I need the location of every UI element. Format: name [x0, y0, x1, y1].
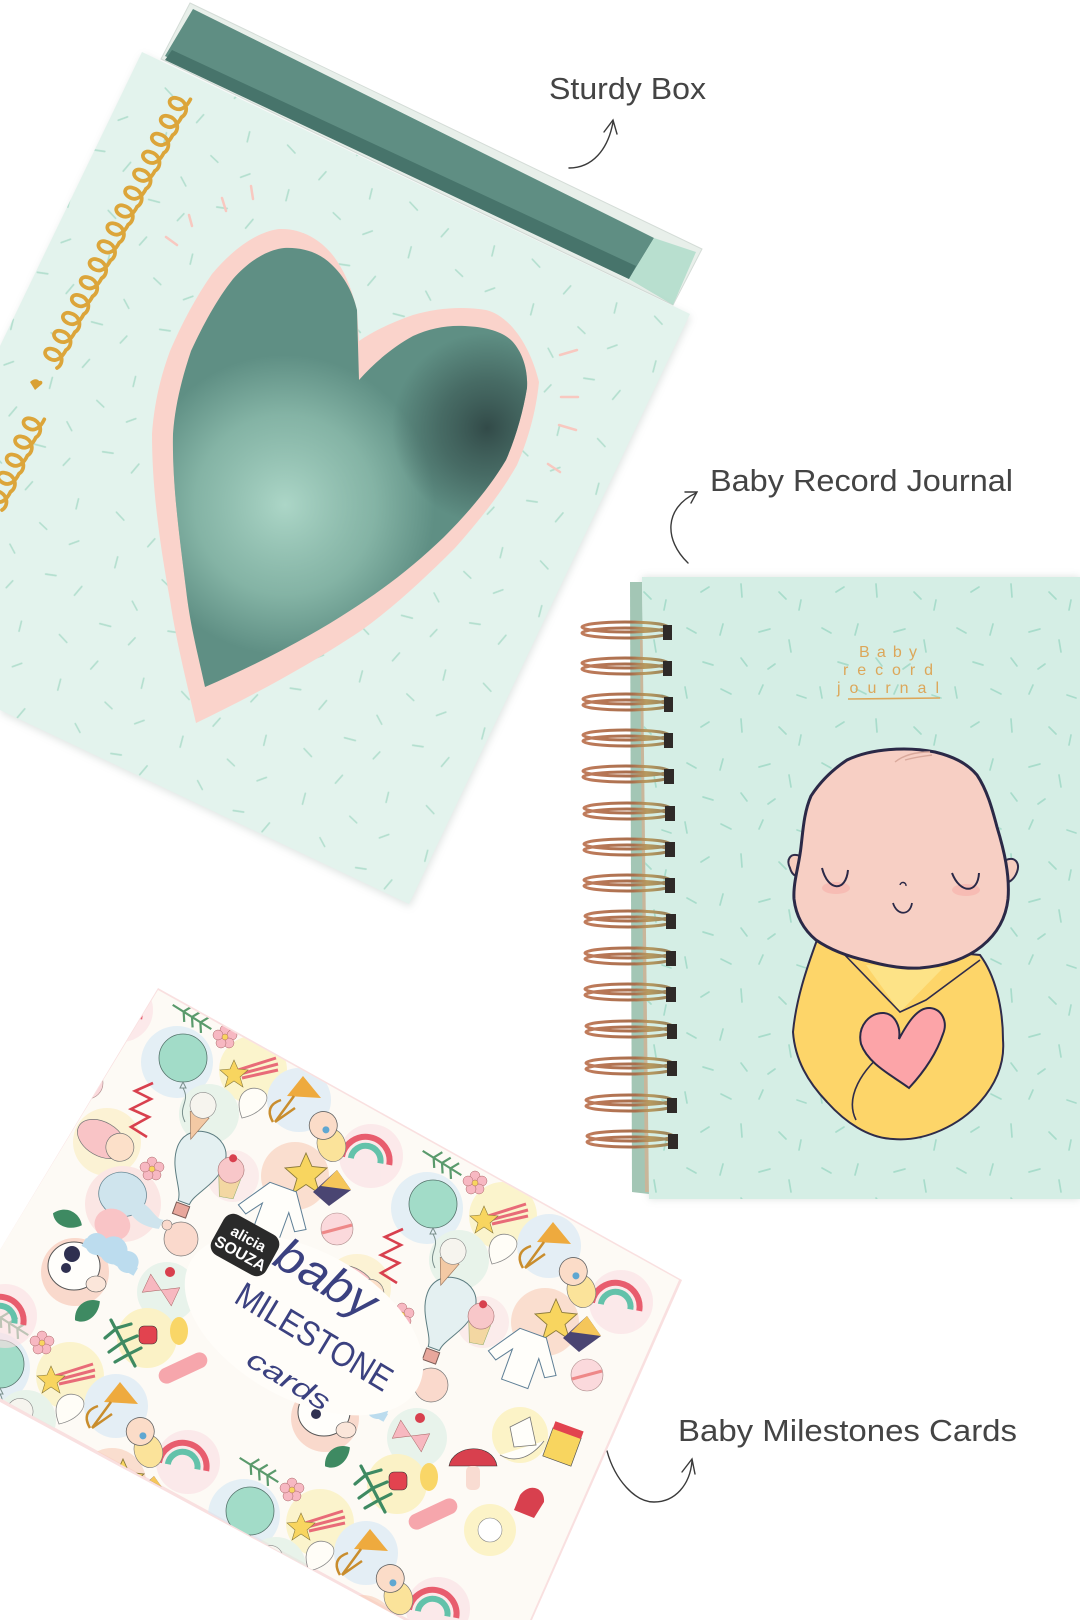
- swaddle body: [793, 940, 1003, 1139]
- head: [794, 749, 1008, 968]
- inner shade band: [165, 50, 636, 279]
- right ear: [1003, 859, 1018, 883]
- binding holes: [663, 625, 678, 1149]
- journal foil title: Baby: [859, 644, 917, 661]
- journal foil title: [836, 644, 939, 697]
- swaddle neck: [866, 965, 943, 1012]
- card title: cards: [241, 1344, 336, 1417]
- central oval: [184, 1238, 424, 1416]
- journal spine edge: [640, 640, 649, 1192]
- brand badge: alicia: [228, 1223, 269, 1256]
- brand badge: SOUZA: [211, 1233, 269, 1275]
- doodle pattern: [0, 1001, 653, 1620]
- nose: [900, 882, 906, 886]
- arrow: baby milestones cards: [607, 1451, 695, 1502]
- baby illustration: [788, 749, 1018, 1139]
- brand badge: [207, 1210, 283, 1280]
- gold foil spiral: [0, 91, 192, 511]
- doodle: toy block: [543, 1421, 584, 1466]
- journal shadow: [642, 577, 1080, 1199]
- card title: baby: [266, 1227, 390, 1330]
- lid: [0, 52, 690, 904]
- product: baby record journal: [582, 577, 1080, 1199]
- cheeks: [822, 882, 980, 896]
- lid confetti: [0, 52, 690, 904]
- doodle: mushroom: [449, 1449, 497, 1490]
- journal cover: [642, 577, 1080, 1199]
- lid shadow: [1, 55, 691, 907]
- product: sturdy box: [0, 3, 702, 907]
- journal foil title: record: [843, 662, 933, 679]
- label: baby milestones cards: Baby Milestones Cards: [678, 1413, 1017, 1448]
- hair strokes: [895, 752, 932, 762]
- pink rays around heart: [166, 186, 578, 472]
- product: baby milestone cards box: [0, 988, 682, 1620]
- card title: [228, 1227, 399, 1417]
- arrow: baby record journal: [671, 492, 697, 563]
- journal confetti: [642, 577, 1080, 1199]
- title underline: [848, 698, 940, 699]
- doodle: mitten: [514, 1488, 544, 1518]
- card title: MILESTONE: [228, 1275, 399, 1399]
- journal spine: [630, 582, 649, 1194]
- label: baby record journal: Baby Record Journal: [710, 463, 1013, 498]
- doodle: rocking horse: [492, 1407, 548, 1463]
- held heart: [860, 1008, 945, 1088]
- box end flap: [629, 238, 696, 305]
- box cover: [0, 990, 679, 1620]
- heart window: [172, 248, 528, 687]
- heart pink frame: [152, 229, 539, 723]
- label: sturdy box: Sturdy Box: [549, 71, 707, 106]
- doodle: bunny: [464, 1504, 516, 1556]
- left ear: [788, 855, 803, 877]
- box base: [161, 3, 702, 305]
- box side edge: [0, 988, 682, 1620]
- arrow: sturdy box: [569, 120, 617, 168]
- journal foil title: journal: [836, 680, 939, 697]
- closed eyes: [822, 868, 979, 889]
- mouth: [893, 903, 912, 913]
- gold foil small heart: [30, 379, 42, 390]
- swaddle folds: [840, 950, 980, 1120]
- spiral binding: [582, 622, 673, 1147]
- box inner wall: [165, 9, 654, 279]
